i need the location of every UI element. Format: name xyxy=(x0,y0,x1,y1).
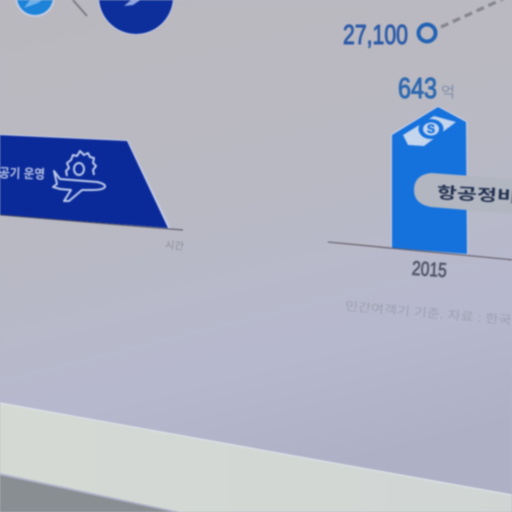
connector line between circles xyxy=(72,0,87,16)
dashed trend line xyxy=(441,0,512,27)
chart axis line xyxy=(328,242,512,260)
icon: banknote on bar top xyxy=(403,116,456,146)
value: 643: 643 xyxy=(398,73,437,105)
icon: dark blue plane circle xyxy=(98,0,174,35)
value: 643: 억 xyxy=(441,84,455,101)
icon: gear and airplane xyxy=(53,151,105,201)
page edge highlight xyxy=(0,403,512,495)
dark base surface xyxy=(0,475,172,512)
icon: light blue plane circle xyxy=(15,0,55,17)
data point marker xyxy=(418,24,436,42)
year label: 2015: 2015 xyxy=(411,258,448,282)
ledge below page xyxy=(0,403,512,512)
icon: banknote on bar top: S xyxy=(427,122,435,136)
axis label: time: 시간 xyxy=(165,239,184,253)
banner: aircraft operation step xyxy=(0,134,171,229)
pill label: aircraft maintenance xyxy=(414,173,512,214)
bar: 2015 maintenance cost xyxy=(391,106,468,255)
value: 27,100: 27,100 xyxy=(343,19,408,50)
pill label: aircraft maintenance: 항공정비 xyxy=(436,184,512,206)
source note: 민간여객기 기준. 자료 : 한국 xyxy=(344,299,512,328)
banner label: 공기 운영 xyxy=(0,165,45,182)
axis line under banner xyxy=(0,215,183,230)
